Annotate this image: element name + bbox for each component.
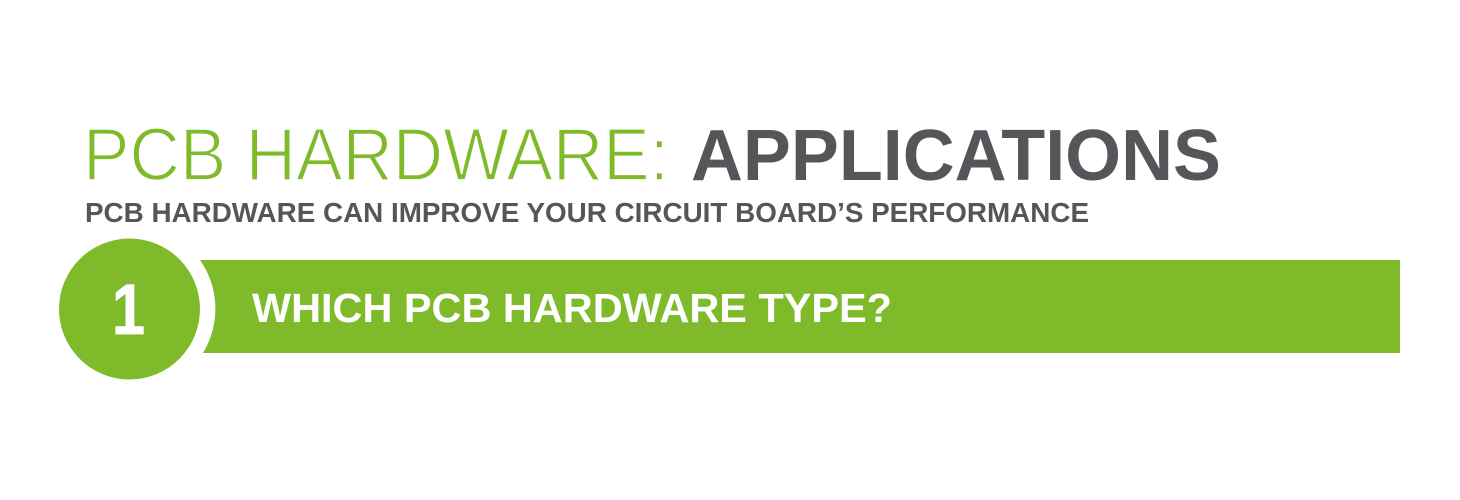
step number badge xyxy=(59,238,200,380)
title xyxy=(83,113,1221,196)
banner text: WHICH PCB HARDWARE TYPE? xyxy=(252,285,892,331)
subtitle: PCB HARDWARE CAN IMPROVE YOUR CIRCUIT BOARD’S PERFORMANCE xyxy=(85,197,1089,228)
badge circle xyxy=(59,238,200,380)
title: bold grey part: APPLICATIONS xyxy=(691,116,1221,196)
banner bar xyxy=(200,260,1400,353)
title: light green part: PCB HARDWARE: xyxy=(83,113,669,196)
badge number: 1 xyxy=(112,271,145,350)
banner: step heading xyxy=(200,260,1400,353)
